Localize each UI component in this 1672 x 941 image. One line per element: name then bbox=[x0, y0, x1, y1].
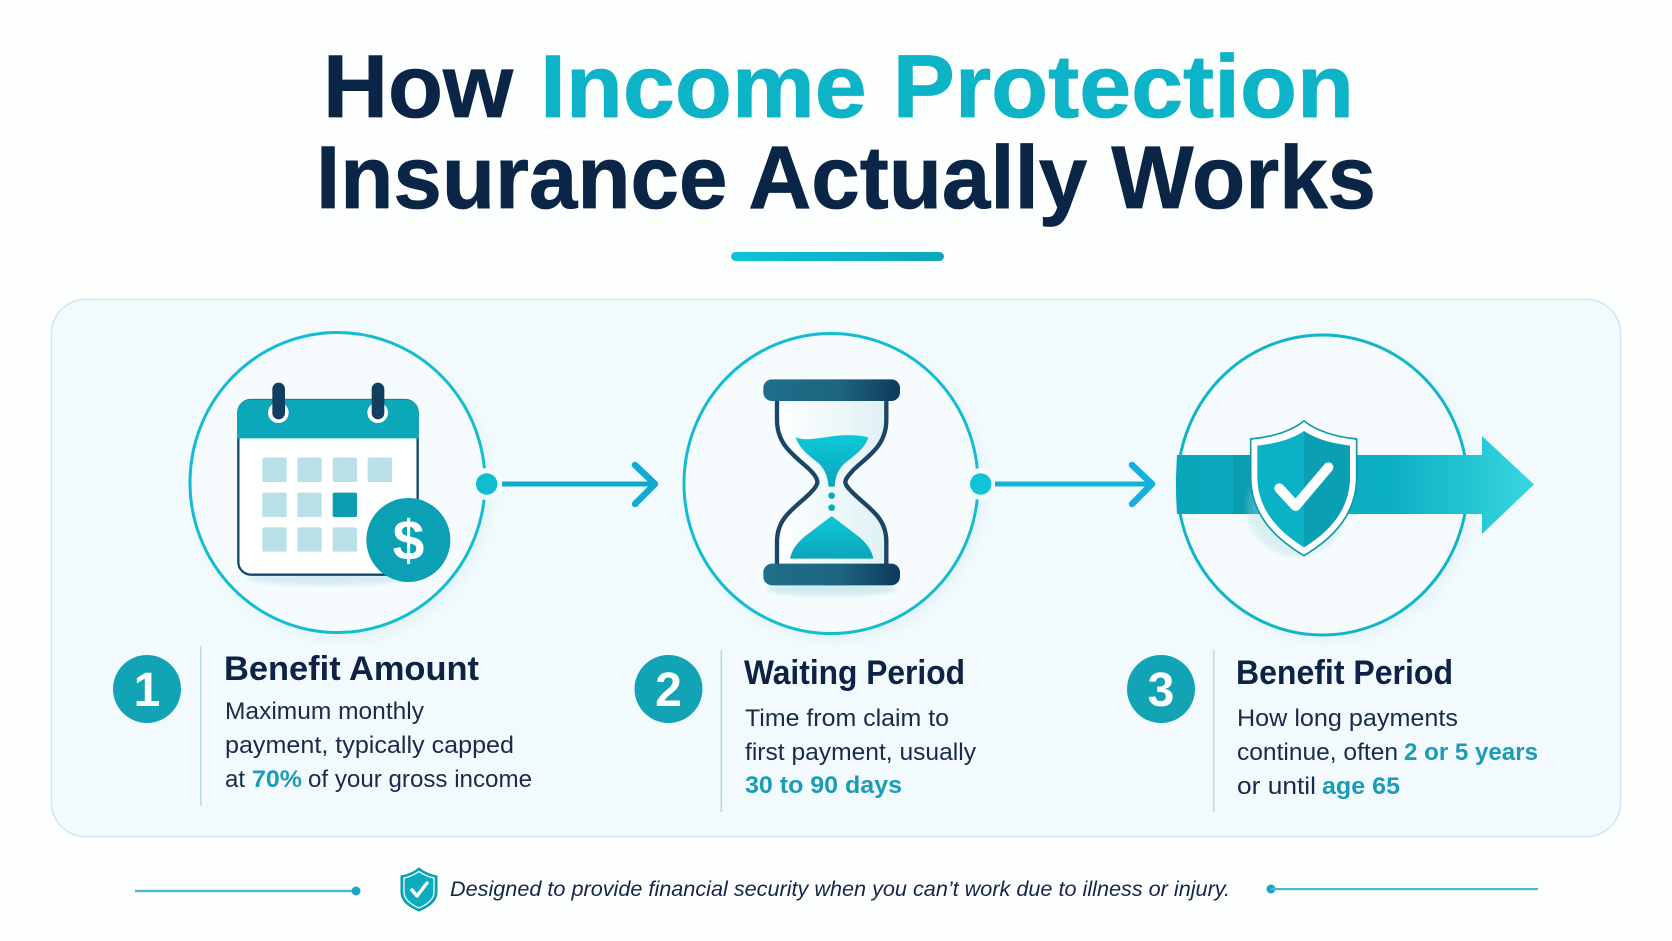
description: benefit period: 2 or 5 years bbox=[1404, 739, 1538, 766]
description: benefit amount: payment, typically capped bbox=[225, 732, 514, 759]
number badge 2 bbox=[634, 655, 702, 723]
description: benefit period: continue, often bbox=[1237, 739, 1398, 766]
number badge 2: 2 bbox=[655, 664, 682, 717]
icon: small shield bbox=[401, 868, 437, 911]
description: waiting period bbox=[745, 705, 976, 799]
description: benefit amount bbox=[225, 698, 532, 793]
heading: benefit amount: Benefit Amount bbox=[224, 650, 479, 688]
step 1 text bbox=[113, 646, 532, 806]
number badge 1: 1 bbox=[134, 664, 160, 717]
title: Income Protection bbox=[540, 36, 1354, 136]
description: benefit period bbox=[1237, 705, 1538, 800]
description: benefit amount: 70% bbox=[252, 766, 302, 793]
heading: benefit period: Benefit Period bbox=[1236, 654, 1453, 692]
panel: steps background bbox=[52, 300, 1620, 836]
connector arrow 1 bbox=[471, 465, 655, 504]
description: benefit amount: Maximum monthly bbox=[225, 698, 424, 725]
step 1 illustration: calendar: $ bbox=[393, 509, 424, 573]
heading: waiting period: Waiting Period bbox=[744, 654, 965, 692]
step 3 illustration: shield on arrow bbox=[1176, 335, 1534, 639]
step 2 text bbox=[634, 650, 976, 812]
description: waiting period: 30 to 90 days bbox=[745, 772, 902, 799]
footer note: Designed to provide financial security when you can’t work due to illness or injury. bbox=[450, 877, 1230, 901]
step 2 illustration: hourglass bbox=[684, 334, 982, 639]
description: benefit period: How long payments bbox=[1237, 705, 1458, 732]
number badge 3 bbox=[1127, 655, 1195, 723]
title underline bbox=[731, 252, 944, 261]
title: How bbox=[323, 36, 514, 136]
number badge 1 bbox=[113, 655, 181, 723]
step 3 text bbox=[1127, 650, 1538, 812]
description: benefit amount: of your gross income bbox=[308, 766, 532, 793]
number badge 3: 3 bbox=[1148, 664, 1174, 717]
title bbox=[316, 36, 1376, 227]
description: benefit period: or until bbox=[1237, 773, 1316, 800]
title: Insurance Actually Works bbox=[316, 127, 1376, 227]
description: benefit period: age 65 bbox=[1322, 773, 1400, 800]
description: waiting period: Time from claim to bbox=[745, 705, 949, 732]
description: benefit amount: at bbox=[225, 766, 245, 793]
description: waiting period: first payment, usually bbox=[745, 739, 976, 766]
footer bbox=[135, 868, 1538, 911]
connector arrow 2 bbox=[965, 465, 1152, 504]
step 1 illustration: calendar bbox=[190, 332, 489, 638]
